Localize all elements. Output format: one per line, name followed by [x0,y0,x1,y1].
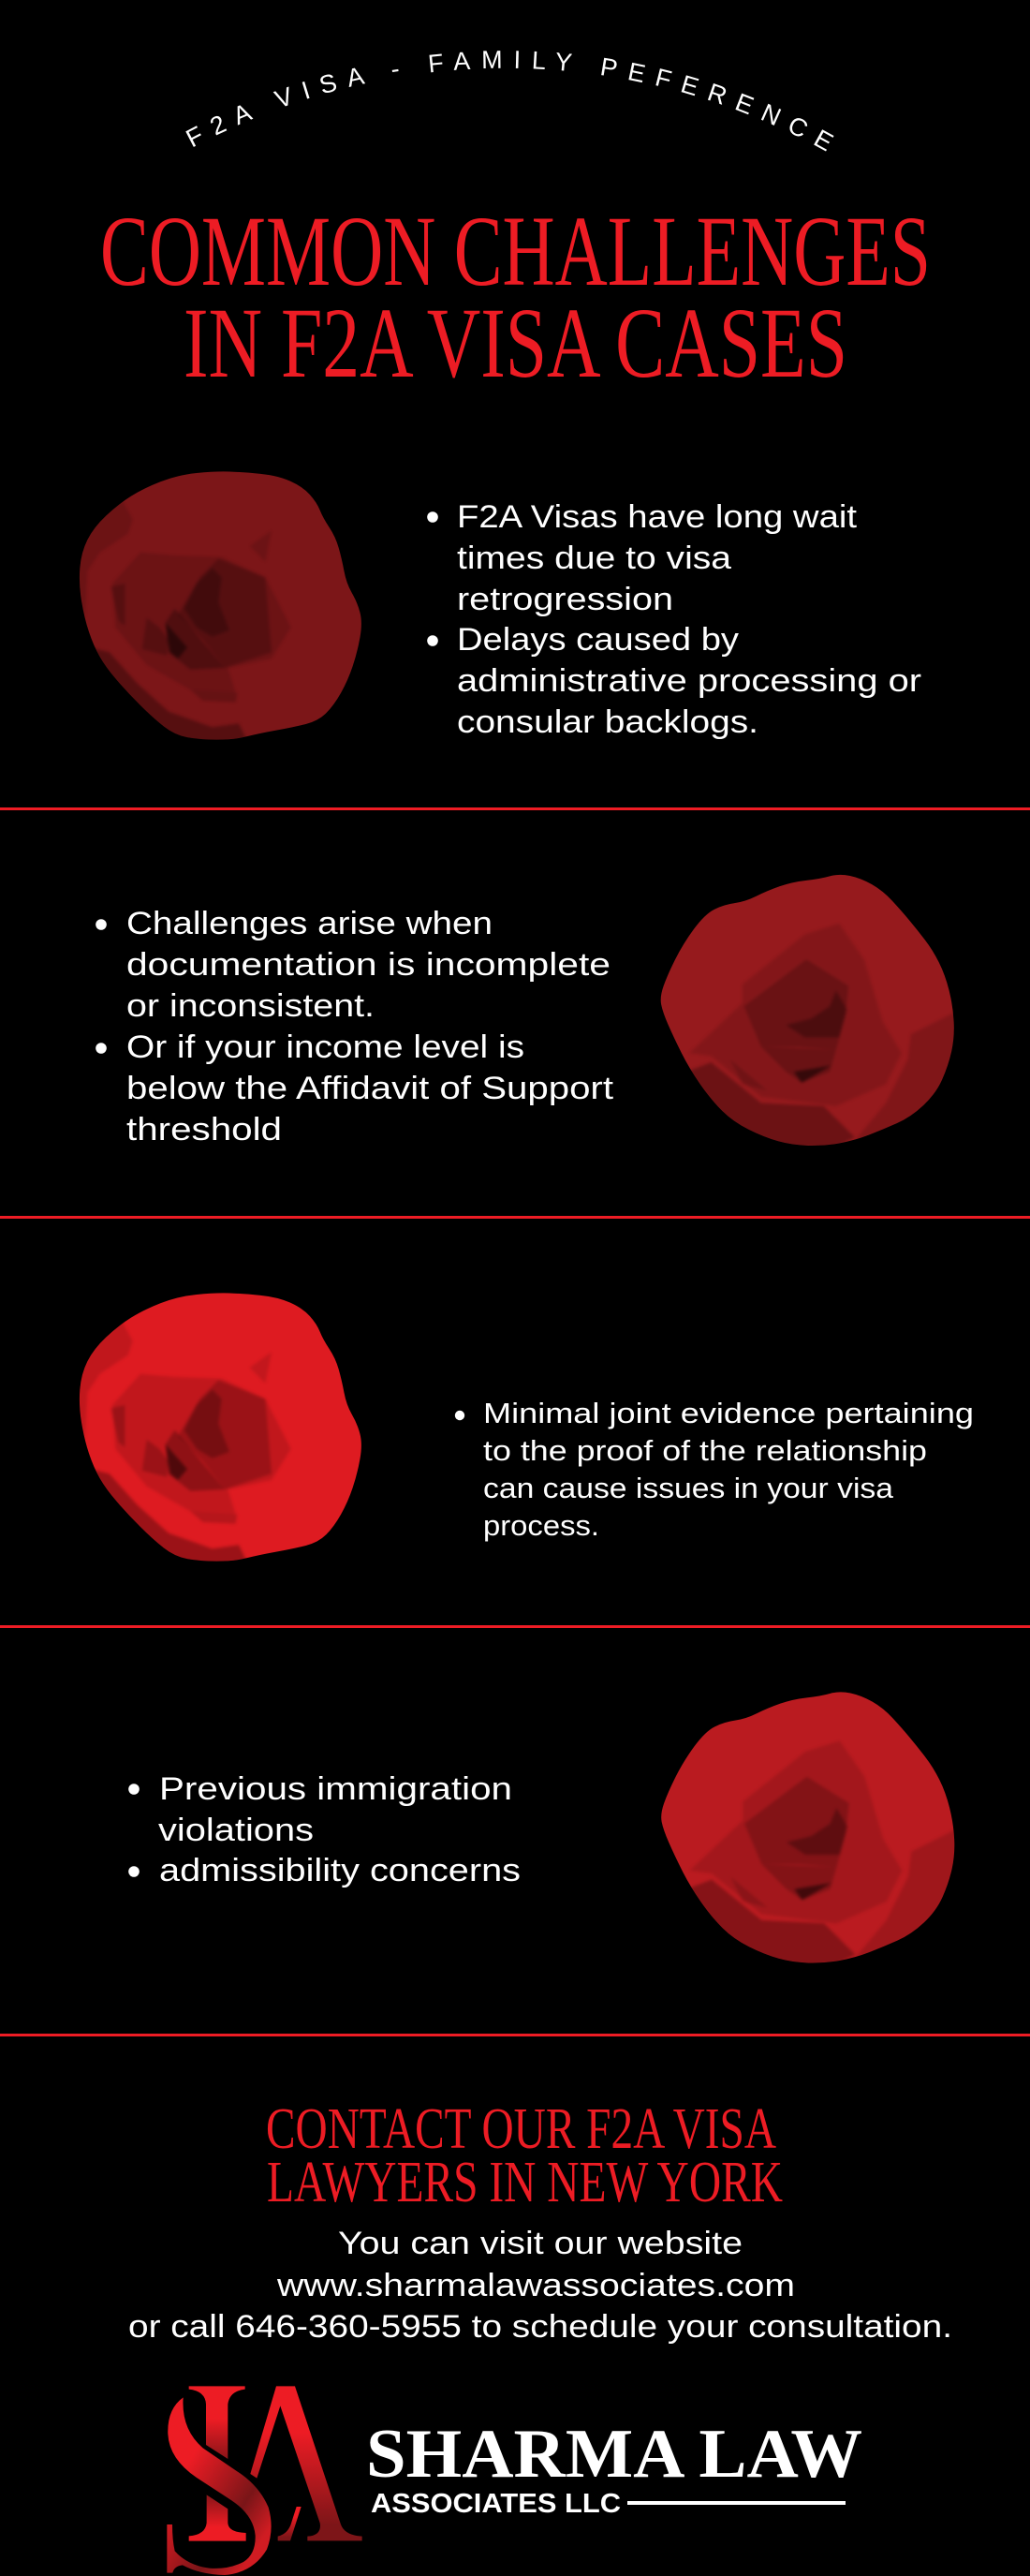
logo subtitle: ASSOCIATES LLC [371,2489,621,2519]
logo mark: SA monogram [167,2386,362,2575]
panel: joint evidence [72,1293,974,1571]
bullet list: wait times: consular backlogs. [457,704,758,740]
panel: wait times and delays [72,471,921,749]
title [100,197,931,399]
contact heading [266,2097,783,2214]
bullet list: wait times: administrative processing or [457,663,921,699]
panel: documentation and income [96,875,961,1153]
curved eyebrow: F2A visa family preference: F2A VISA - FAMILY PEFERENCE [185,51,833,152]
bullet list: documentation [96,906,614,1147]
contact details: or call 646-360-5955 to schedule your consultation. [128,2309,952,2345]
contact details: You can visit our website [338,2226,743,2261]
contact heading: CONTACT OUR F2A VISA [266,2097,776,2161]
contact details [128,2226,952,2345]
bullet list: documentation: Or if your income level is [126,1029,524,1065]
bullet list: violations: admissibility concerns [159,1853,521,1888]
icon: dark red blob [72,471,361,749]
bullet list: violations: violations [158,1813,314,1848]
bullet list: joint evidence: can cause issues in your visa [483,1472,894,1504]
logo wordmark: SHARMA LAW [366,2416,862,2493]
icon: crimson blob [661,875,961,1153]
bullet list: documentation: below the Affidavit of Support [126,1071,614,1106]
bullet list: documentation: threshold [126,1112,282,1147]
contact details: www.sharmalawassociates.com [276,2268,795,2303]
bullet list: violations [128,1771,521,1888]
bullet list: wait times: F2A Visas have long wait [457,499,858,535]
bullet list: wait times: Delays caused by [457,622,739,658]
bullet list: wait times: retrogression [457,582,673,617]
logo: Sharma Law Associates [167,2386,862,2575]
bullet list: joint evidence: process. [483,1509,599,1542]
bullet list: violations: Previous immigration [159,1771,512,1807]
bullet list: wait times [427,499,921,740]
bullet list: documentation: Challenges arise when [126,906,493,941]
contact heading: LAWYERS IN NEW YORK [267,2151,783,2214]
panel: immigration violations [128,1692,962,1970]
bullet list: joint evidence [455,1397,974,1542]
bullet list: documentation: documentation is incomplete [126,947,611,983]
bullet list: joint evidence: to the proof of the relationship [483,1434,927,1467]
icon: red blob [661,1692,962,1970]
bullet list: joint evidence: Minimal joint evidence pertaining [483,1397,974,1429]
bullet list: documentation: or inconsistent. [126,988,375,1024]
icon: bright red blob [72,1293,361,1571]
bullet list: wait times: times due to visa [457,540,731,576]
